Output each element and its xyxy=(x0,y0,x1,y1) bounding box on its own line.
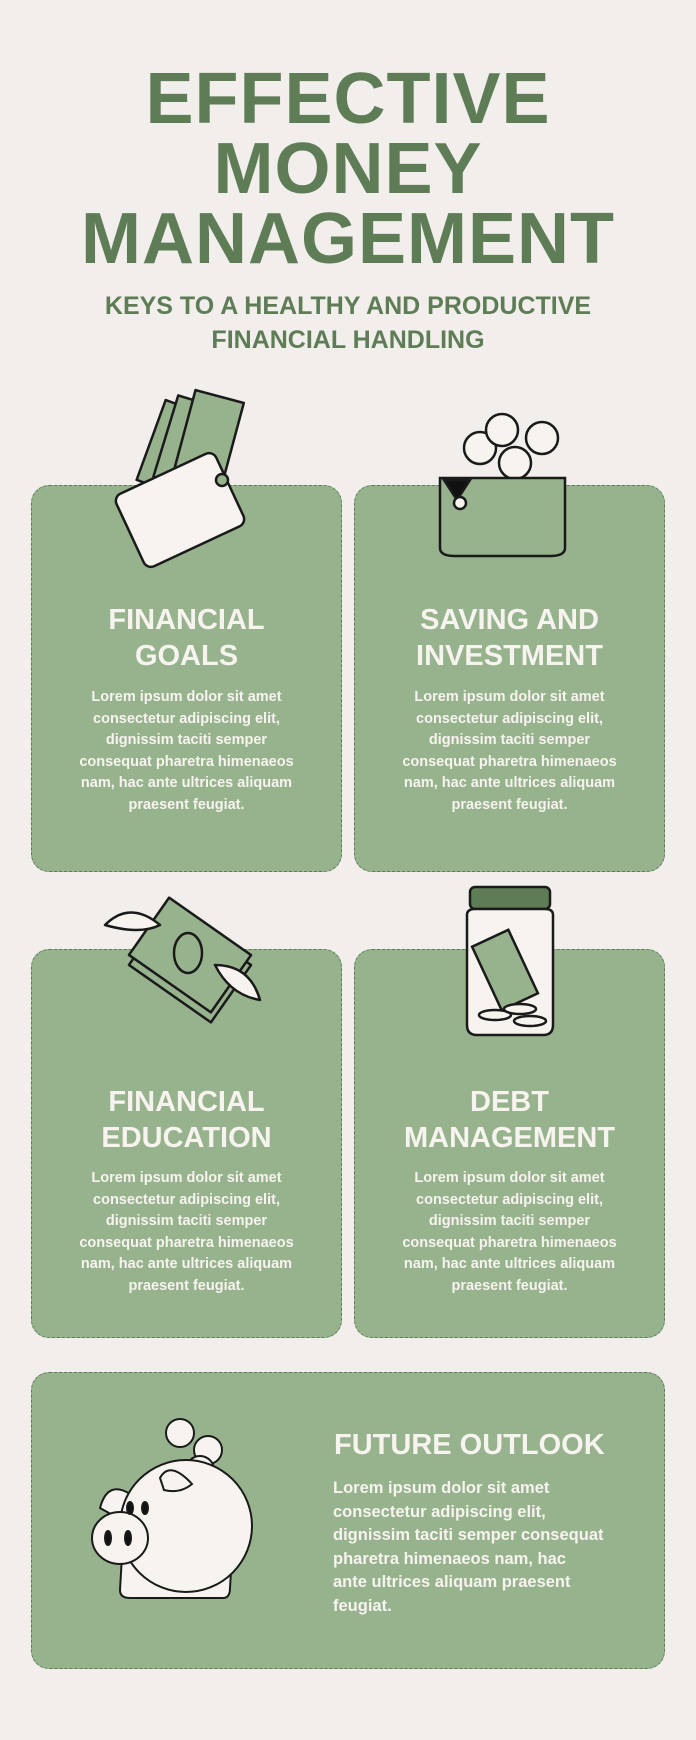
text: education xyxy=(79,1170,294,1294)
text: saving: consectetur adipiscing elit, xyxy=(416,710,603,726)
text: debt: consectetur adipiscing elit, xyxy=(416,1192,603,1208)
heading: saving and investment xyxy=(416,604,603,672)
heading: debt management xyxy=(404,1086,615,1154)
text: future outlook: ante ultrices aliquam praesent xyxy=(333,1573,571,1591)
text: education: consectetur adipiscing elit, xyxy=(93,1192,280,1208)
text: debt: dignissim taciti semper xyxy=(429,1213,590,1229)
heading: financial education: FINANCIAL xyxy=(108,1086,265,1118)
heading: debt management: MANAGEMENT xyxy=(404,1122,615,1154)
title xyxy=(81,59,615,279)
text: financial goals: consequat pharetra himenaeos xyxy=(79,754,294,770)
icon: piggy bank xyxy=(91,1418,253,1599)
subtitle: FINANCIAL HANDLING xyxy=(211,326,485,354)
text: saving: consequat pharetra himenaeos xyxy=(402,754,617,770)
text: debt: consequat pharetra himenaeos xyxy=(402,1234,617,1250)
title: MONEY xyxy=(213,129,483,209)
text: financial goals: praesent feugiat. xyxy=(128,796,245,812)
text: saving: dignissim taciti semper xyxy=(429,732,590,748)
text: future outlook: pharetra himenaeos nam, hac xyxy=(333,1550,566,1568)
text: future outlook xyxy=(333,1479,604,1614)
text: future outlook: dignissim taciti semper consequat xyxy=(333,1526,604,1544)
text: debt: praesent feugiat. xyxy=(451,1278,568,1294)
text: saving: Lorem ipsum dolor sit amet xyxy=(414,689,605,705)
heading: financial goals xyxy=(108,604,265,672)
panel: financial goals xyxy=(31,485,342,872)
heading: future outlook: FUTURE OUTLOOK xyxy=(334,1429,605,1461)
icon: money jar xyxy=(466,886,554,1036)
text: education: consequat pharetra himenaeos xyxy=(79,1234,294,1250)
panel: financial education xyxy=(31,949,342,1338)
text: education: dignissim taciti semper xyxy=(106,1213,267,1229)
heading: financial education xyxy=(101,1086,272,1154)
text: education: praesent feugiat. xyxy=(128,1278,245,1294)
text: education: nam, hac ante ultrices aliquam xyxy=(81,1256,292,1272)
text: future outlook: consectetur adipiscing elit, xyxy=(333,1502,546,1520)
heading: financial goals: GOALS xyxy=(135,640,238,672)
title: MANAGEMENT xyxy=(81,199,615,279)
subtitle xyxy=(105,292,591,354)
heading: debt management: DEBT xyxy=(470,1086,549,1118)
heading: financial education: EDUCATION xyxy=(101,1122,272,1154)
text: saving: praesent feugiat. xyxy=(451,796,568,812)
text: financial goals: dignissim taciti semper xyxy=(106,732,267,748)
text: saving xyxy=(402,689,617,812)
text: debt xyxy=(402,1170,617,1294)
text: saving: nam, hac ante ultrices aliquam xyxy=(404,775,615,791)
title: EFFECTIVE xyxy=(145,59,551,139)
text: financial goals: Lorem ipsum dolor sit amet xyxy=(91,689,282,705)
panel: future outlook xyxy=(31,1372,665,1669)
text: debt: nam, hac ante ultrices aliquam xyxy=(404,1256,615,1272)
text: financial goals: consectetur adipiscing elit, xyxy=(93,710,280,726)
heading: saving and investment: INVESTMENT xyxy=(416,640,603,672)
icon: flying money xyxy=(104,896,262,1024)
panel: saving and investment xyxy=(354,485,665,872)
text: future outlook: Lorem ipsum dolor sit amet xyxy=(333,1479,549,1497)
icon: wallet with money xyxy=(114,388,246,568)
panel: debt management xyxy=(354,949,665,1338)
text: debt: Lorem ipsum dolor sit amet xyxy=(414,1170,605,1186)
heading: financial goals: FINANCIAL xyxy=(108,604,265,636)
text: future outlook: feugiat. xyxy=(333,1596,392,1614)
text: financial goals xyxy=(79,689,294,812)
text: financial goals: nam, hac ante ultrices aliquam xyxy=(81,775,292,791)
heading: saving and investment: SAVING AND xyxy=(420,604,599,636)
text: education: Lorem ipsum dolor sit amet xyxy=(91,1170,282,1186)
icon: coin purse xyxy=(438,412,566,558)
subtitle: KEYS TO A HEALTHY AND PRODUCTIVE xyxy=(105,292,591,320)
